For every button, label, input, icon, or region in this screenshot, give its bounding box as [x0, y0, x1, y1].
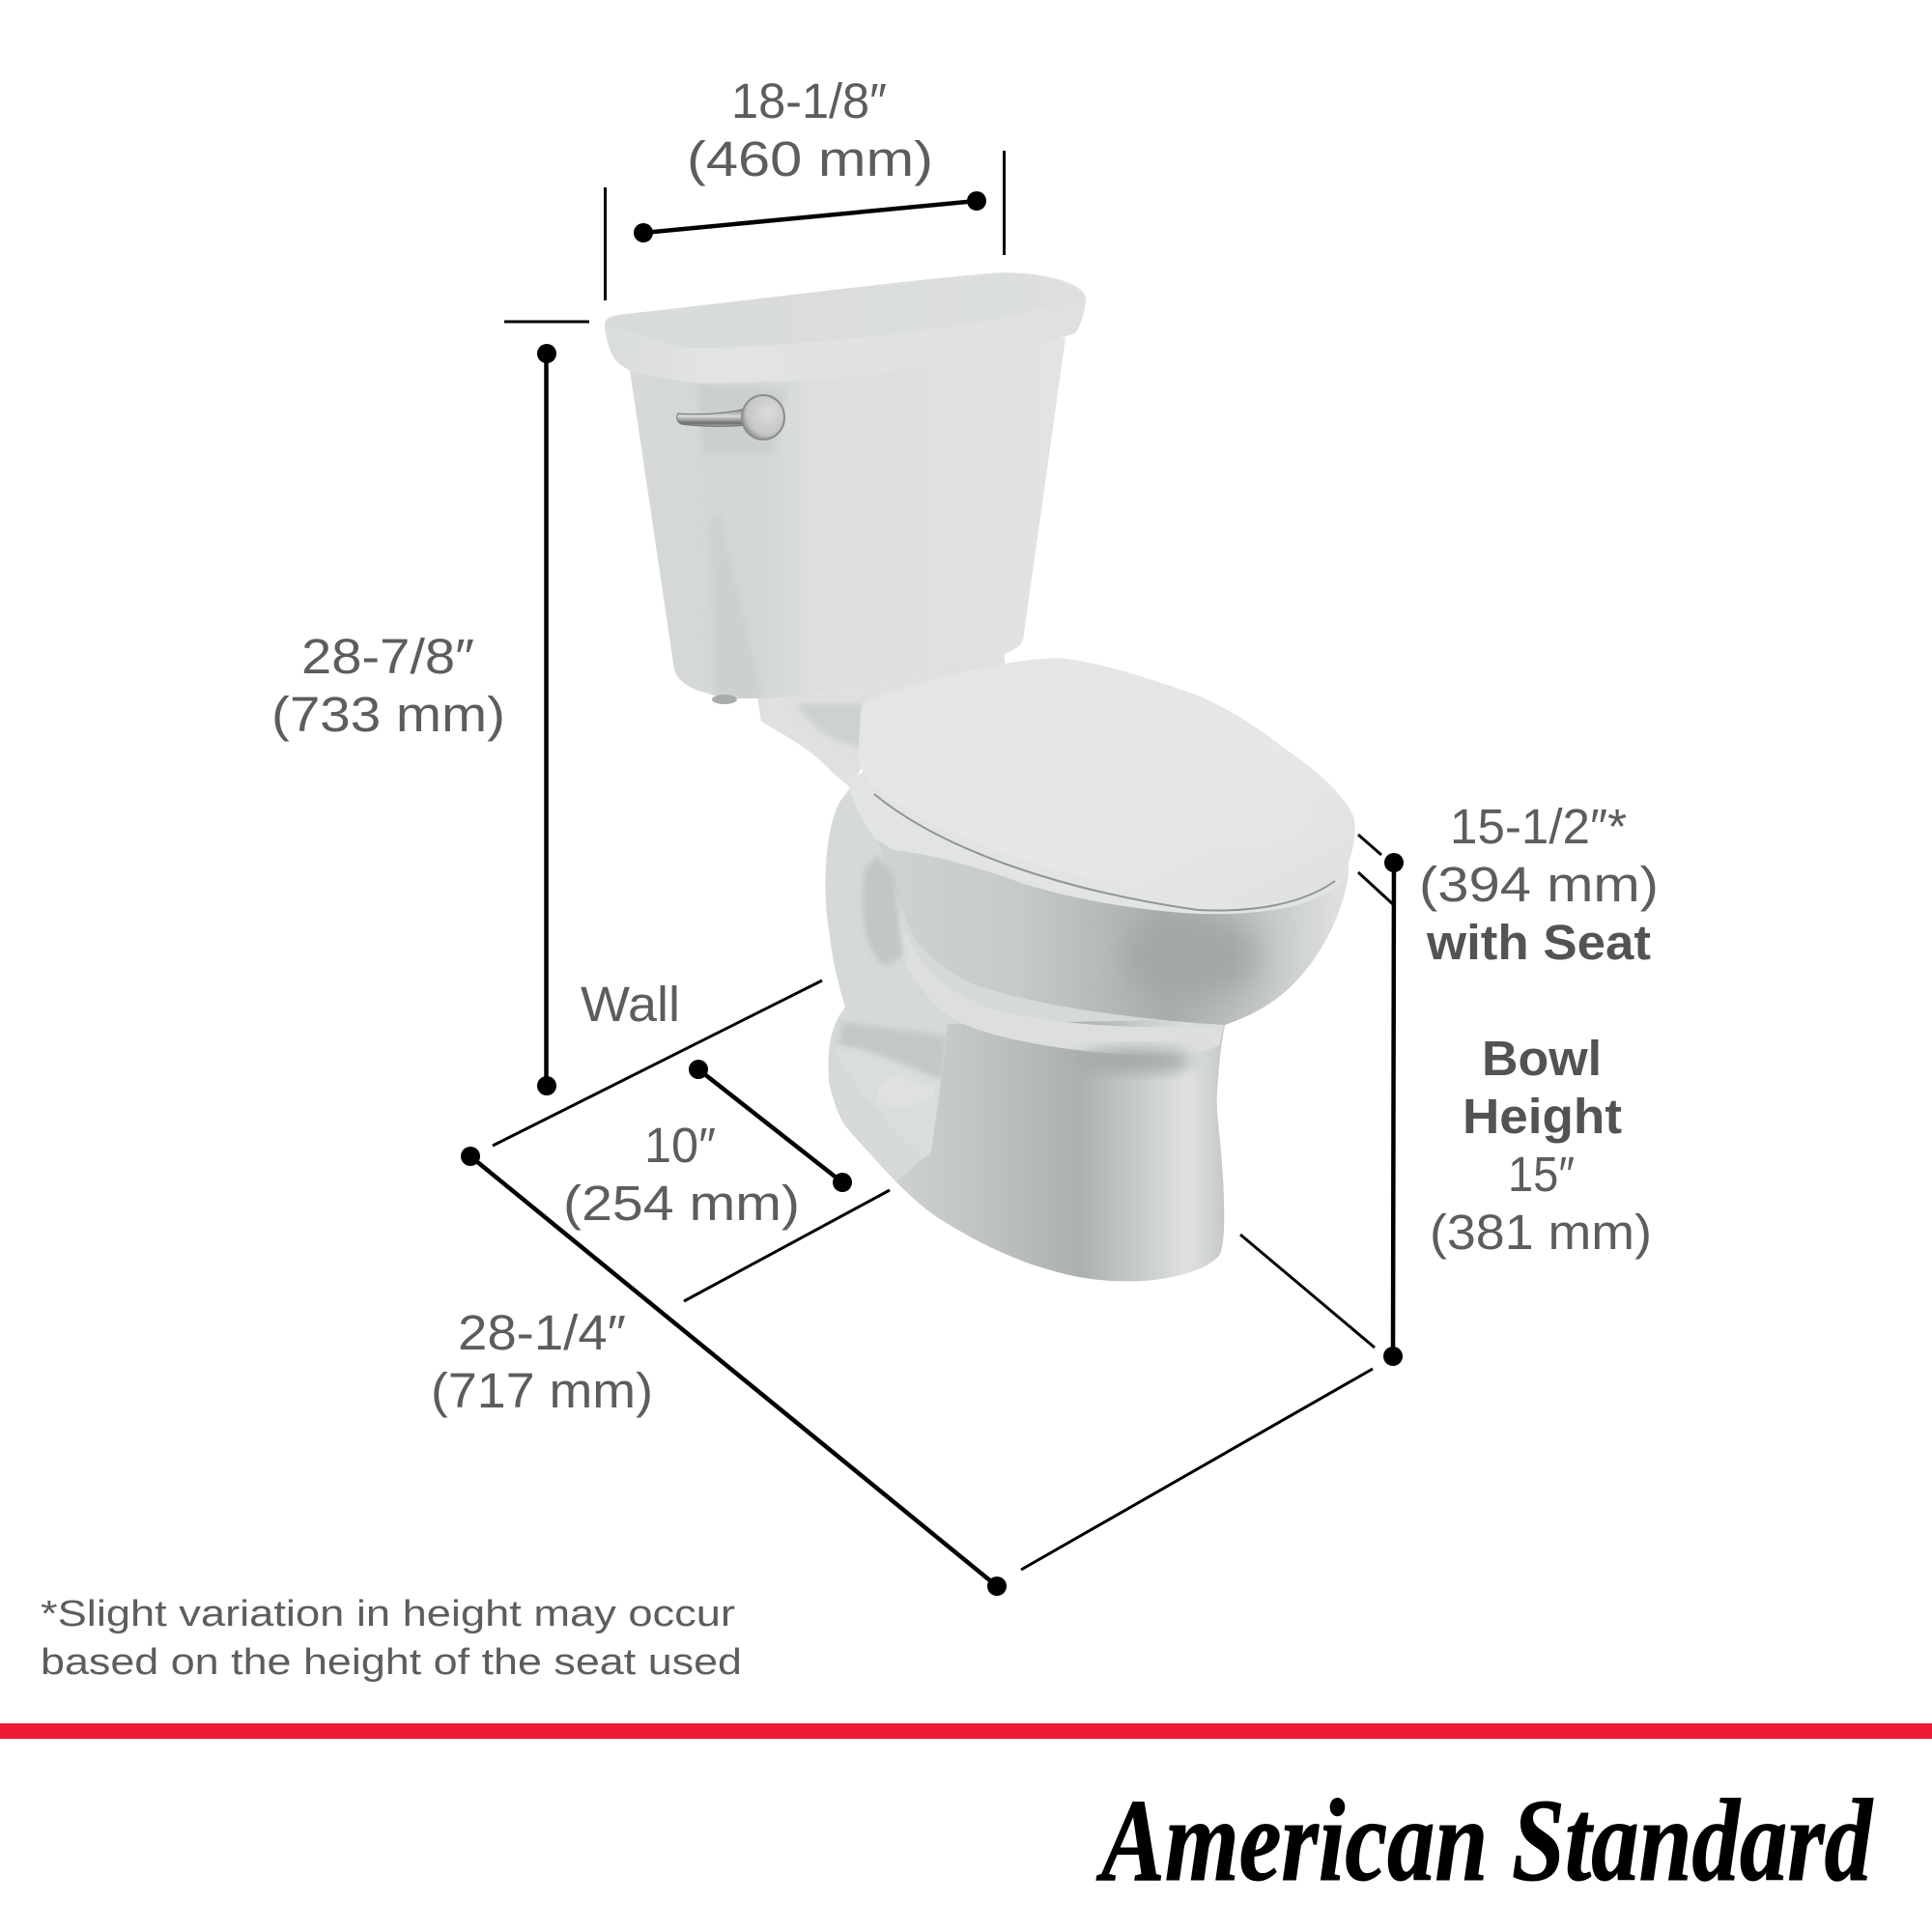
label: bowl height: 15″ [1508, 1147, 1575, 1202]
label: height with seat [1419, 799, 1659, 970]
label: overall height [271, 629, 505, 742]
dimension: overall depth [461, 1147, 1373, 1596]
label: height with seat: (394 mm) [1419, 857, 1659, 912]
tank bolt [712, 695, 737, 704]
dimension: bowl height [1240, 835, 1404, 1366]
wall reference line [493, 980, 822, 1146]
red divider bar [0, 1723, 1932, 1739]
label: overall depth: (717 mm) [431, 1363, 653, 1418]
footnote [41, 1594, 742, 1683]
footnote: based on the height of the seat used [41, 1642, 742, 1683]
label: tank width [687, 73, 933, 186]
label: wall: Wall [581, 977, 680, 1032]
label: rough-in: (254 mm) [563, 1176, 800, 1231]
toilet tank [630, 338, 1065, 704]
rear trapway shading [863, 855, 903, 966]
dimension: tank width [605, 151, 1005, 300]
foot recess [931, 1036, 948, 1151]
bowl rim under seat [847, 773, 1349, 914]
label: height with seat: with Seat [1426, 915, 1651, 970]
label: overall depth: 28-1/4″ [458, 1305, 626, 1360]
label: bowl height: (381 mm) [1430, 1205, 1652, 1260]
seat and lid [859, 658, 1355, 911]
dimension lines [461, 151, 1404, 1596]
bright band under bowl [962, 1022, 1225, 1054]
label: height with seat: 15-1/2″* [1450, 799, 1627, 854]
mounting bolt cap [877, 1076, 935, 1107]
label: bowl height: Bowl [1482, 1031, 1602, 1086]
label: bowl height: Height [1463, 1089, 1622, 1144]
label: overall depth [431, 1305, 653, 1418]
toilet bowl and pedestal [825, 763, 1349, 1290]
label: rough-in: 10″ [644, 1118, 716, 1173]
label: rough-in [563, 1118, 800, 1231]
label: overall height: (733 mm) [271, 687, 505, 742]
toilet neck connecting tank and bowl [757, 652, 1005, 787]
tank lid [605, 272, 1086, 384]
dimension: overall height [504, 322, 589, 1095]
pedestal [896, 1020, 1229, 1281]
flush lever [677, 395, 784, 440]
toilet illustration [605, 272, 1355, 1290]
seat gap line [874, 794, 1335, 911]
label: tank width: 18-1/8″ [731, 73, 887, 128]
label: bowl height [1430, 1031, 1652, 1260]
label: overall height: 28-7/8″ [301, 629, 474, 684]
dimension: rough-in [684, 1060, 890, 1301]
bowl body shading [892, 850, 1347, 1025]
label: tank width: (460 mm) [687, 131, 933, 186]
footnote: *Slight variation in height may occur [41, 1594, 735, 1634]
